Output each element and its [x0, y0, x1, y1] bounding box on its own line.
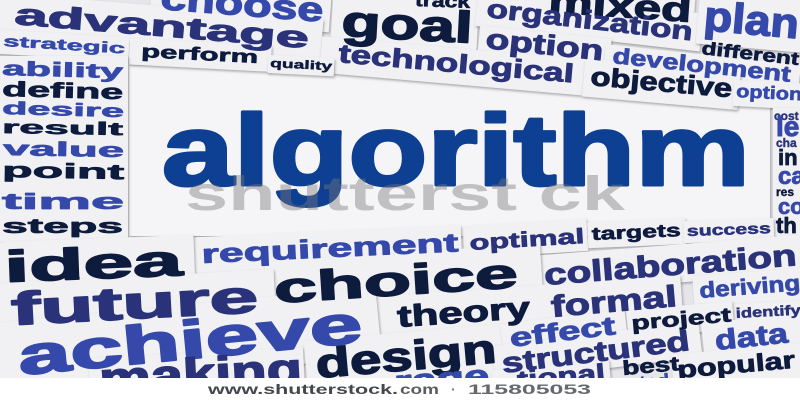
word: project: project: [631, 304, 733, 335]
word: objective: objective: [589, 61, 734, 103]
word: success: success: [687, 220, 771, 240]
word: tional: tional: [516, 359, 606, 394]
word: data: data: [713, 317, 790, 356]
footer: url and image number: ·: [451, 381, 456, 397]
footer: url and image number: com: [400, 381, 439, 397]
footer: url and image number: 115805053: [468, 381, 591, 397]
word: different: different: [701, 38, 800, 69]
word: define: define: [2, 78, 123, 104]
word: desire: desire: [2, 98, 124, 121]
word: option: option: [484, 23, 605, 66]
footer: url and image number: www.shutterstock.: [206, 381, 398, 397]
word: result: result: [2, 117, 123, 139]
word: time: time: [2, 189, 124, 214]
word: best: best: [622, 353, 681, 380]
word: deriving: deriving: [698, 270, 800, 303]
word: steps: steps: [2, 216, 123, 238]
word: le: le: [776, 111, 799, 142]
footer: url and image number: [206, 381, 591, 397]
word: collaboration: collaboration: [543, 239, 798, 292]
word: ted: ted: [639, 370, 670, 395]
word: value: value: [3, 138, 124, 162]
word: requirement: requirement: [201, 227, 460, 269]
panel: central background: [129, 66, 770, 236]
word: formal: formal: [550, 280, 678, 324]
word: identify: identify: [735, 302, 800, 321]
word: coverage: rage: [393, 359, 490, 399]
word: design: design: [314, 325, 498, 387]
word: point: point: [2, 159, 124, 184]
word: in: in: [778, 145, 798, 170]
word: effect: effect: [508, 310, 617, 353]
word: development: development: [611, 43, 793, 87]
word: popular: popular: [676, 347, 796, 384]
word: option small: option: [736, 81, 800, 104]
word: th: th: [776, 213, 797, 238]
word: cha: cha: [776, 136, 797, 150]
word: perform: perform: [141, 41, 259, 67]
word: ability: ability: [2, 58, 125, 83]
word: quality: quality: [270, 56, 333, 73]
word: targets: targets: [591, 220, 681, 244]
watermark: shutterstock: shutterst ck: [185, 168, 625, 221]
word: choice: choice: [273, 249, 519, 312]
word: res: res: [776, 185, 794, 199]
word: technological: technological: [337, 38, 575, 89]
word: future: future: [10, 270, 259, 335]
word: theory: theory: [396, 292, 532, 334]
word: idea: idea: [4, 236, 184, 292]
word: achieve: achieve: [15, 294, 365, 387]
word: cos: cost: [774, 109, 799, 123]
word: optimal: optimal: [469, 225, 585, 255]
word: structured: structured: [500, 325, 691, 379]
word: strategic: strategic: [3, 33, 126, 57]
title: algorithm: algorithm: [162, 95, 750, 207]
